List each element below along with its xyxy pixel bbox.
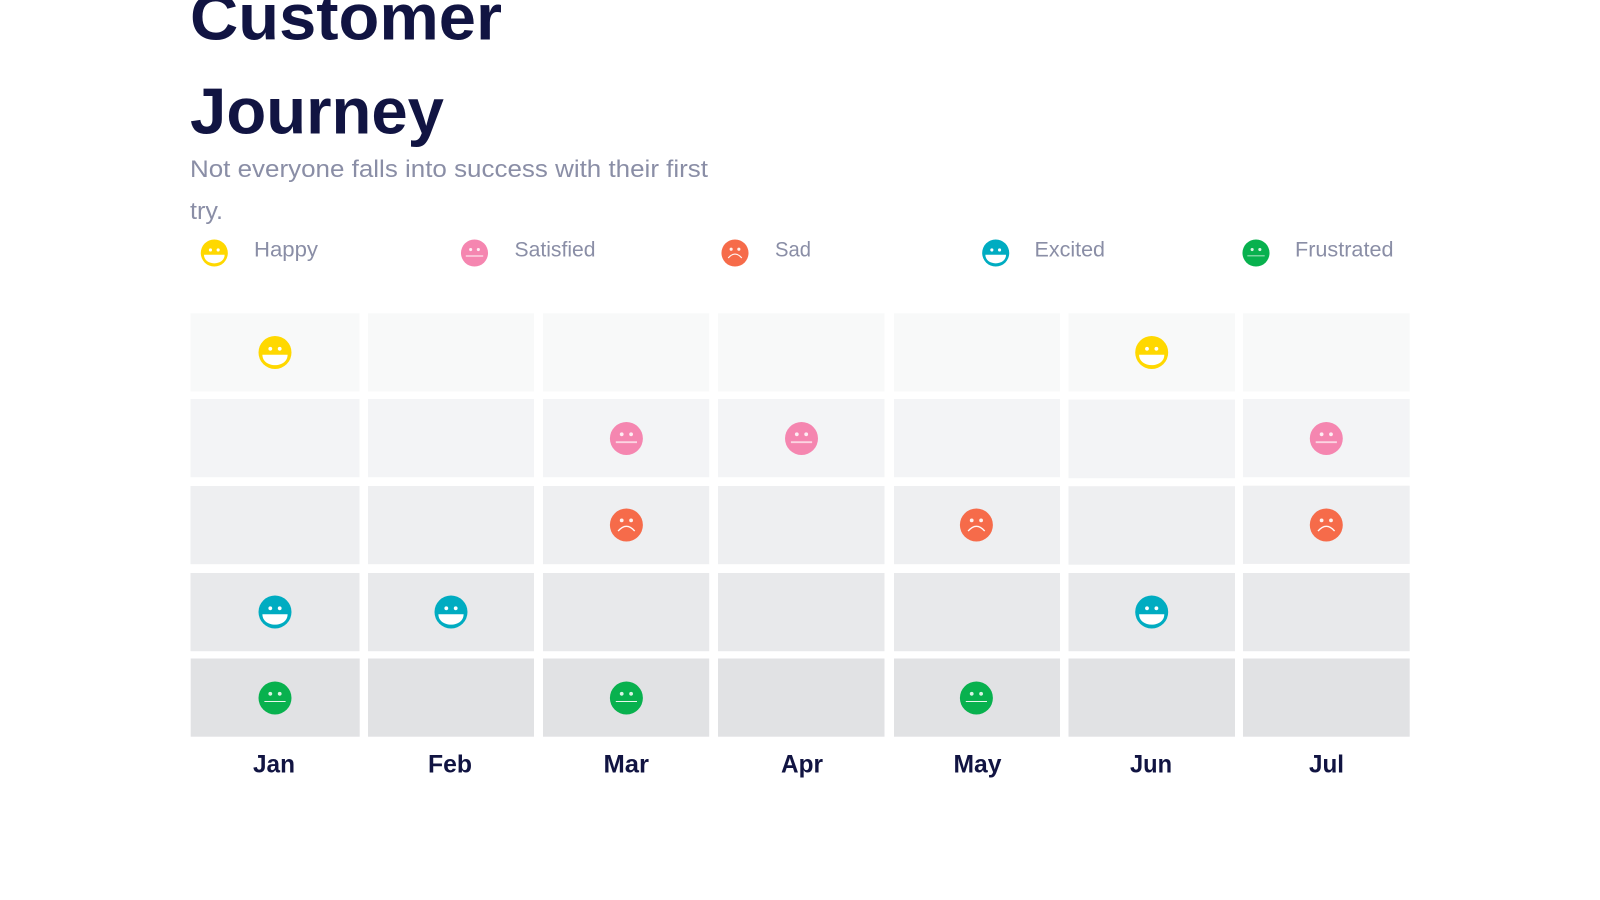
subtitle: try. <box>190 198 223 225</box>
month axis: May <box>954 751 1002 779</box>
icon: sad Jul <box>1310 508 1343 542</box>
month axis: Jun <box>1130 751 1172 779</box>
month axis <box>253 751 1344 779</box>
icon: frustrated Mar <box>610 682 643 714</box>
subtitle <box>190 156 708 225</box>
icon: satisfied Apr <box>785 422 818 455</box>
legend label: frustrated: Frustrated <box>1295 238 1394 262</box>
month axis: Apr <box>781 751 823 779</box>
legend icon: sad <box>721 239 749 267</box>
month axis: Jan <box>253 751 295 779</box>
title: Journey <box>190 74 444 147</box>
icon: excited Jun <box>1135 596 1168 628</box>
title <box>190 0 502 147</box>
icon: satisfied Jul <box>1310 422 1343 455</box>
legend icon: satisfied <box>461 239 488 267</box>
legend icon: excited <box>982 239 1009 267</box>
row 3 cells <box>190 486 1410 565</box>
icon: sad Mar <box>610 508 643 542</box>
month axis: Jul <box>1309 751 1344 779</box>
legend label: excited: Excited <box>1034 238 1105 262</box>
icon: frustrated May <box>960 682 993 714</box>
subtitle: Not everyone falls into success with their first <box>190 156 708 183</box>
icon: sad May <box>960 508 993 542</box>
icon: happy Jun <box>1135 336 1168 369</box>
legend <box>201 238 1393 267</box>
icon: frustrated Jan <box>258 682 292 714</box>
row 1 cells <box>190 313 1410 392</box>
icon: excited Jan <box>258 596 292 628</box>
row 4 cells <box>190 573 1410 651</box>
month axis: Feb <box>428 751 472 779</box>
mood matrix <box>190 313 1410 737</box>
legend label: sad: Sad <box>775 238 811 262</box>
icon: satisfied Mar <box>610 422 643 455</box>
icon: excited Feb <box>434 596 468 628</box>
icon: happy Jan <box>258 336 292 369</box>
month axis: Mar <box>604 751 649 779</box>
legend icon: frustrated <box>1242 239 1270 267</box>
legend label: happy: Happy <box>254 238 318 262</box>
row 2 cells <box>190 399 1410 478</box>
legend label: satisfied: Satisfied <box>514 238 596 262</box>
row 5 cells <box>191 658 1410 737</box>
legend icon: happy <box>201 239 228 267</box>
